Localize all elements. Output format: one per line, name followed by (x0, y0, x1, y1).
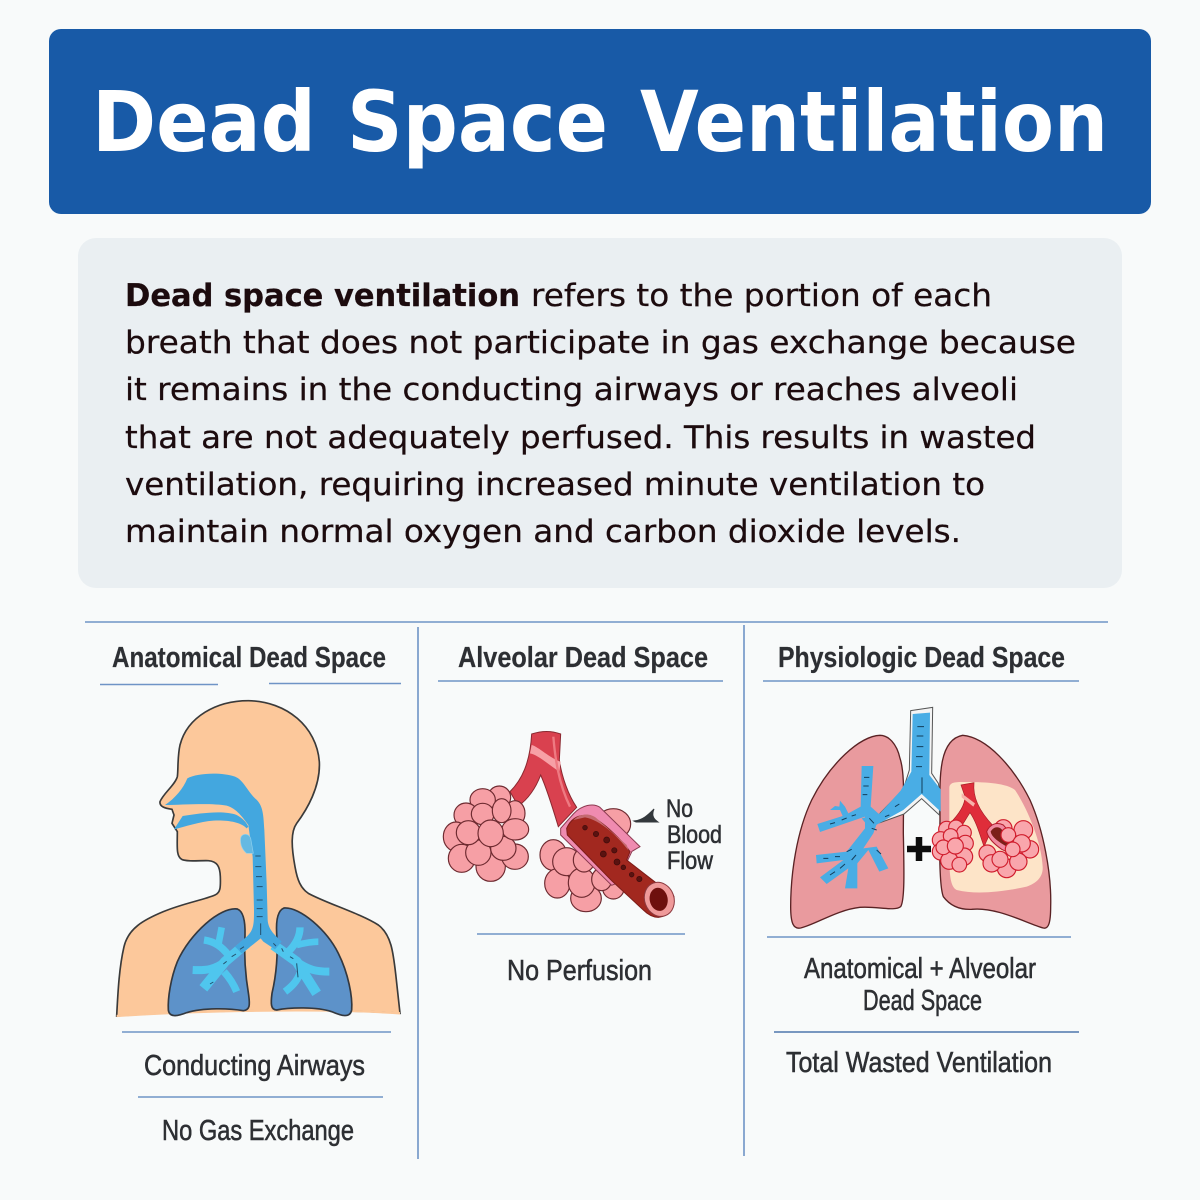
text block: definition: maintain normal oxygen and carbon dioxide levels. (125, 514, 961, 550)
label: total wasted ventilation: Total Wasted Ventilation (786, 1047, 1052, 1079)
blocked vessel (561, 805, 640, 885)
illustration: alveoli and blocked vessel (443, 731, 679, 921)
heading: physiologic: Physiologic Dead Space (778, 642, 1065, 674)
right lung (940, 735, 1051, 928)
text block: definition: refers to the portion of each (531, 278, 992, 314)
label: no blood flow: No (666, 795, 693, 823)
panel: definition (78, 238, 1122, 588)
title: Dead (92, 73, 316, 171)
text block: definition: that are not adequately perfused. This results in wasted (125, 420, 1036, 456)
panel: physiologic dead space (778, 642, 1065, 1079)
heading: alveolar: Alveolar Dead Space (458, 642, 708, 674)
right lung (271, 908, 352, 1016)
left lung (168, 909, 249, 1016)
alveoli left (932, 820, 973, 872)
label: anatomical + alveolar dead space: Anatomical + Alveolar (804, 953, 1036, 985)
bronchi (193, 927, 329, 993)
label: anatomical + alveolar dead space: Dead Space (863, 985, 982, 1017)
label: no blood flow: Blood (667, 821, 722, 849)
text block: definition: breath that does not participate in gas exchange because (125, 325, 1076, 361)
alveoli right (540, 809, 631, 912)
illustration: combined lungs (791, 707, 1051, 928)
trachea and right bronchi (880, 707, 940, 823)
title (92, 73, 1108, 171)
icon: plus sign (907, 837, 931, 861)
text block: definition: it remains in the conducting airways or reaches alveoli (125, 372, 1018, 408)
text block: definition: Dead space ventilation (125, 278, 520, 314)
title: Ventilation (640, 73, 1108, 171)
panel: alveolar dead space (443, 642, 722, 987)
alveoli right (979, 820, 1039, 878)
perfused zone (949, 782, 1043, 892)
text block: definition (125, 278, 1076, 550)
title: Space (347, 73, 608, 171)
airways (510, 731, 577, 827)
arrow: no blood flow pointer (634, 809, 658, 822)
alveoli left (443, 786, 529, 881)
label: no perfusion: No Perfusion (507, 955, 652, 987)
illustration: head, airway and lungs (117, 701, 400, 1016)
red vessels (949, 783, 993, 847)
airway (165, 774, 282, 953)
text block: definition: ventilation, requiring increased minute ventilation to (125, 467, 985, 503)
blocked vessel (987, 824, 1013, 853)
label: anatomical + alveolar dead space (804, 953, 1036, 1017)
panel: anatomical dead space (112, 642, 400, 1147)
label: no gas exchange: No Gas Exchange (162, 1115, 354, 1147)
label: no blood flow: Flow (667, 847, 714, 875)
title banner (49, 29, 1151, 214)
heading: anatomical: Anatomical Dead Space (112, 642, 386, 674)
label: conducting airways: Conducting Airways (144, 1050, 365, 1082)
left lung (791, 735, 904, 928)
label: no blood flow (666, 795, 722, 875)
